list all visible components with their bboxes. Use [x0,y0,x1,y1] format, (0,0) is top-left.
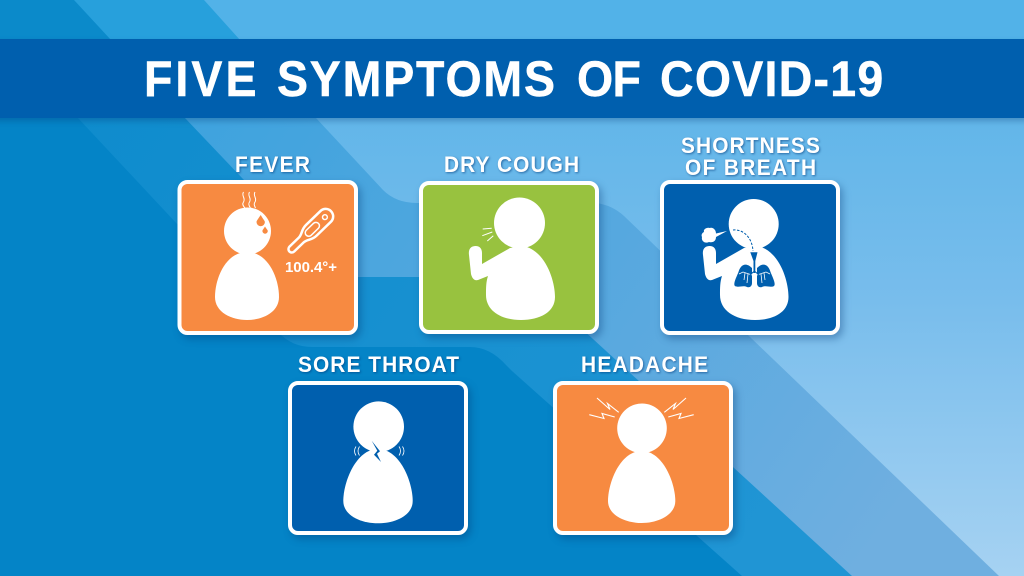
heading: headache: HEADACHE [581,353,708,377]
panel: fever [180,153,356,333]
heading: dry cough: DRY COUGH [444,153,579,177]
heading: shortness of breath: OF BREATH [685,156,816,180]
title banner [0,39,1024,118]
title: SYMPTOMS [277,51,555,107]
heading: fever: FEVER [235,153,310,177]
temperature reading: 100.4°+ [285,259,337,276]
title: COVID-19 [660,51,883,107]
heading: shortness of breath: SHORTNESS [681,134,820,158]
card: shortness of breath [662,182,838,333]
heading: sore throat: SORE THROAT [298,353,459,377]
panel: dry cough [421,153,597,332]
icon: person with lungs [702,199,788,320]
card: fever [180,182,356,333]
card: headache [555,383,731,533]
title: FIVE [144,51,256,107]
icon: person with sore throat [343,401,413,523]
icon: feverish person [215,192,279,320]
panel: shortness of breath [662,134,838,333]
title: OF [577,51,641,107]
panel: headache [555,353,731,533]
card: dry cough [421,183,597,332]
icon: thermometer [284,206,336,257]
icon: coughing person [469,198,555,320]
card: sore throat [290,383,466,533]
icon: person with headache [589,398,694,523]
panel: sore throat [290,353,466,533]
